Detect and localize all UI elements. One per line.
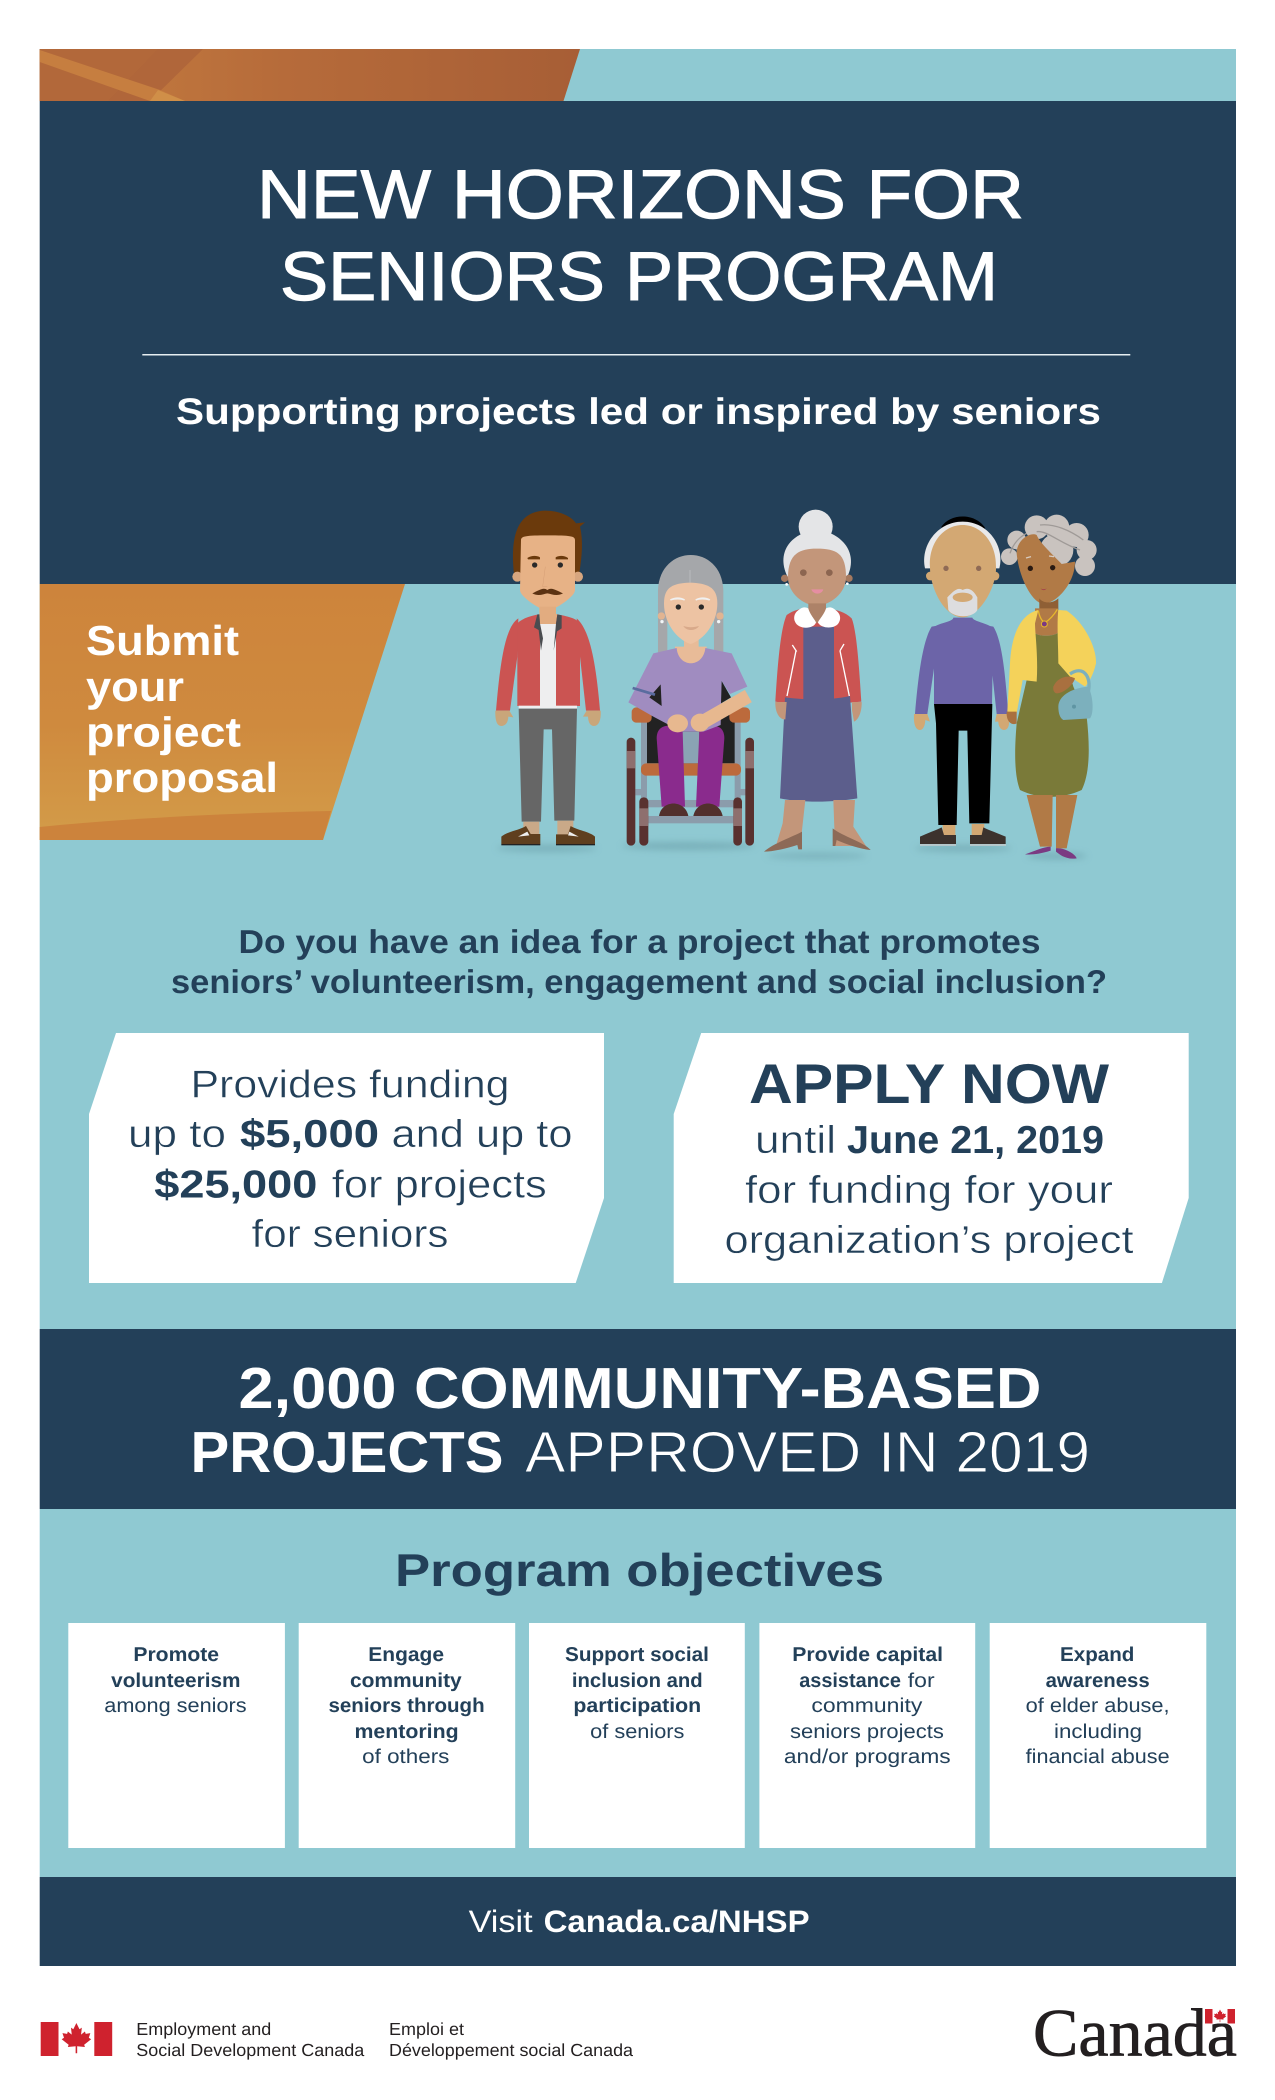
figure: man with moustache: [495, 511, 601, 852]
card: provide capital assistance: community: [811, 1695, 922, 1717]
card: promote volunteerism: among seniors: [104, 1695, 247, 1717]
question text: Do you have an idea for a project that promotes: [238, 923, 1040, 960]
figure: woman with white bun and red jacket: [764, 510, 871, 859]
panel: submit your project proposal: your: [86, 663, 184, 710]
card: support social inclusion: of seniors: [590, 1721, 684, 1743]
figure: woman with curly hair and yellow cardigan: [1001, 515, 1097, 859]
panel: funding amounts: $5,000: [240, 1113, 379, 1156]
banner: visit website: Visit: [469, 1904, 533, 1939]
heading: program objectives: Program objectives: [395, 1544, 884, 1596]
question text: seniors’ volunteerism, engagement and social inclusion?: [171, 963, 1107, 1000]
card: provide capital assistance: seniors projects: [790, 1721, 944, 1743]
card: engage community seniors: community: [350, 1670, 463, 1692]
title: SENIORS PROGRAM: [280, 238, 998, 315]
banner: visit website: Canada.ca/NHSP: [544, 1904, 810, 1939]
banner: 2,000 community-based projects: 2,000 COMMUNITY-BASED: [238, 1356, 1042, 1421]
icon: Canadian flag signature: [41, 2022, 112, 2056]
card: expand awareness: financial abuse: [1026, 1746, 1170, 1768]
card: expand awareness: of elder abuse,: [1026, 1695, 1170, 1717]
panel: teal main background: [40, 584, 1236, 1329]
question text: [171, 923, 1107, 1000]
panel: apply now: for funding for your: [745, 1169, 1113, 1212]
panel: submit your project proposal: [40, 584, 405, 840]
text: department name English: Employment and: [136, 2019, 271, 2039]
panel: submit your project proposal: proposal: [86, 754, 278, 801]
text: department name French: Développement social Canada: [389, 2040, 633, 2060]
card: support social inclusion: inclusion and: [572, 1670, 703, 1692]
card: engage community seniors: seniors through: [328, 1695, 485, 1717]
card: support social inclusion: participation: [573, 1695, 701, 1717]
panel: funding amounts: Provides funding: [190, 1064, 510, 1106]
figure: bald man with white beard: [914, 516, 1012, 852]
panel: funding amounts: [89, 1033, 604, 1283]
panel: funding amounts: and up to: [392, 1113, 572, 1156]
panel: apply now: [674, 1033, 1189, 1283]
text: department name French: [389, 2019, 633, 2060]
card: support social inclusion: Support social: [565, 1644, 709, 1666]
panel: submit your project proposal: Submit: [86, 617, 239, 664]
illustration: group of seniors: [495, 510, 1097, 859]
card: promote volunteerism: volunteerism: [111, 1670, 240, 1692]
banner: 2,000 community-based projects: PROJECTS: [190, 1420, 504, 1485]
panel: program objectives background: [40, 1509, 1236, 1877]
panel: funding amounts: for seniors: [252, 1213, 448, 1256]
card: engage community seniors: of others: [362, 1746, 449, 1768]
panel: submit your project proposal: project: [86, 708, 241, 756]
panel: funding amounts: $25,000: [154, 1164, 317, 1206]
text: department name French: Emploi et: [389, 2019, 464, 2039]
card: expand awareness: awareness: [1046, 1670, 1150, 1692]
card: expand awareness: [990, 1623, 1206, 1848]
panel: funding amounts: up to: [128, 1113, 226, 1156]
card: provide capital assistance: for: [908, 1670, 935, 1692]
text: department name English: Social Development Canada: [136, 2040, 365, 2060]
subtitle: Supporting projects led or inspired by seniors: [176, 391, 1101, 432]
panel: apply now: organization’s project: [724, 1219, 1134, 1262]
card: promote volunteerism: [68, 1623, 285, 1848]
card: provide capital assistance: and/or programs: [784, 1746, 951, 1768]
panel: funding amounts: for projects: [332, 1164, 547, 1206]
card: provide capital assistance: assistance: [799, 1670, 901, 1692]
card: expand awareness: including: [1054, 1721, 1142, 1743]
panel: header background: [40, 101, 1236, 584]
banner: 2,000 community-based projects: APPROVED IN 2019: [525, 1420, 1090, 1485]
logo: Canada wordmark: Canada: [1033, 1994, 1237, 2070]
title: [257, 156, 1024, 315]
panel: top decorative strip: [40, 49, 1236, 101]
panel: apply now: June 21, 2019: [847, 1119, 1104, 1162]
banner: visit website: [40, 1877, 1236, 1966]
panel: apply now: APPLY NOW: [749, 1052, 1109, 1115]
text: department name English: [136, 2019, 365, 2060]
banner: 2,000 community-based projects: [40, 1329, 1236, 1509]
card: engage community seniors: mentoring: [354, 1721, 459, 1743]
card: support social inclusion: [529, 1623, 745, 1848]
card: provide capital assistance: Provide capital: [792, 1644, 943, 1666]
panel: apply now: until: [755, 1119, 836, 1162]
card: promote volunteerism: Promote: [133, 1644, 219, 1666]
card: engage community seniors: [299, 1623, 515, 1848]
title: NEW HORIZONS FOR: [257, 156, 1024, 233]
card: provide capital assistance: [759, 1623, 975, 1848]
figure: woman in wheelchair: [622, 555, 755, 850]
card: engage community seniors: Engage: [368, 1644, 444, 1666]
card: expand awareness: Expand: [1060, 1644, 1134, 1666]
